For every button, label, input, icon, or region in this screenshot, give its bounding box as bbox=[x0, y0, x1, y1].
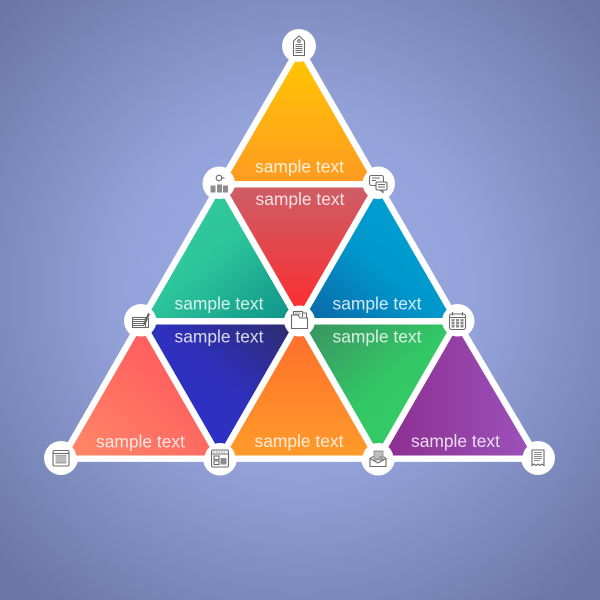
triangle: indigo inverted bbox=[141, 321, 299, 459]
label: coral: sample text bbox=[96, 432, 185, 452]
icon: notepad and pencil bbox=[126, 306, 156, 336]
icon: receipt bbox=[522, 442, 554, 474]
triangle: blue bbox=[299, 184, 457, 321]
triangle: red inverted bbox=[220, 184, 378, 321]
label: purple: sample text bbox=[411, 431, 500, 451]
label: orange: sample text bbox=[255, 431, 344, 451]
icon: bar chart bbox=[204, 168, 235, 199]
label: teal: sample text bbox=[175, 293, 264, 313]
triangle: purple bbox=[378, 321, 538, 459]
label: top: sample text bbox=[255, 157, 344, 177]
triangle: orange bbox=[220, 321, 378, 459]
icon: price tag bbox=[283, 30, 315, 62]
triangle: teal bbox=[141, 184, 299, 321]
label: red: sample text bbox=[256, 189, 345, 209]
white node discs under triangles bbox=[44, 29, 555, 476]
label: green: sample text bbox=[333, 326, 422, 346]
icon: folder bbox=[284, 306, 315, 336]
label: blue: sample text bbox=[333, 293, 422, 313]
icon: document window bbox=[46, 442, 76, 474]
label: indigo: sample text bbox=[175, 326, 264, 346]
icon: open envelope bbox=[362, 443, 394, 474]
triangle: coral bbox=[62, 321, 220, 459]
icon: speech bubbles bbox=[362, 168, 394, 199]
icon: browser layout bbox=[204, 443, 236, 474]
triangle: green inverted bbox=[299, 321, 457, 459]
icon: calendar bbox=[442, 306, 473, 336]
triangle: top yellow bbox=[220, 48, 378, 184]
